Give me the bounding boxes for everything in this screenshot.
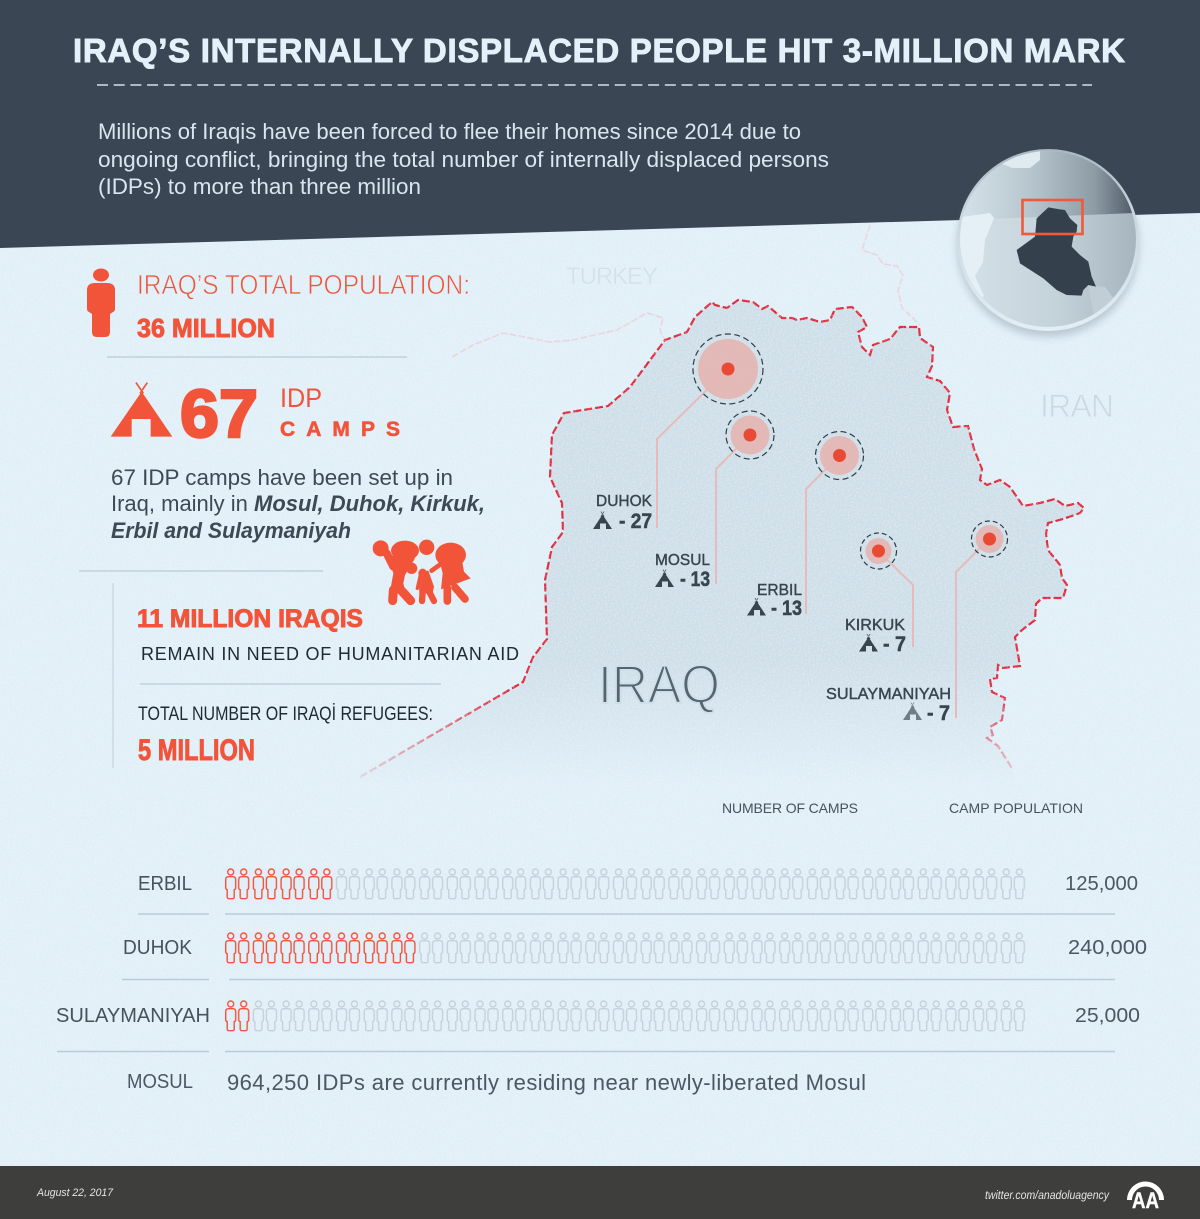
row: Erbil: ERBIL — [138, 873, 192, 895]
total population value: 36 MILLION — [137, 313, 275, 343]
icon: agency logo — [1127, 1182, 1164, 1213]
intro paragraph — [98, 119, 829, 199]
refugees label: TOTAL NUMBER OF IRAQİ REFUGEES: — [138, 704, 433, 725]
leader lines — [657, 369, 989, 718]
row: Mosul: 964,250 IDPs are currently residing near newly-liberated Mosul — [227, 1070, 866, 1095]
country labels — [566, 263, 1114, 715]
row: Sulaymaniyah — [56, 1000, 1140, 1036]
city label: Kirkuk — [845, 617, 906, 656]
camp marker: Erbil — [816, 432, 864, 480]
city label: Duhok: DUHOK — [596, 493, 652, 510]
footer twitter handle: twitter.com/anadoluagency — [985, 1190, 1110, 1202]
row: Erbil — [138, 868, 1138, 904]
camp marker: Duhok — [693, 334, 763, 404]
country labels: IRAQ — [598, 655, 720, 715]
map: Iraq shape — [360, 300, 1084, 790]
header band — [0, 0, 1200, 248]
row: Duhok: 240,000 — [1068, 937, 1147, 959]
city label: Mosul: - 13 — [680, 568, 710, 591]
city label: Erbil — [747, 582, 802, 620]
camps description: 67 IDP camps have been set up in — [111, 465, 453, 490]
paper texture — [0, 215, 1200, 1165]
intro paragraph: (IDPs) to more than three million — [98, 174, 421, 199]
column headers: CAMP POPULATION — [949, 800, 1083, 816]
city label: Sulaymaniyah — [826, 686, 951, 725]
camp marker: Sulaymaniyah — [972, 521, 1008, 557]
icon: refugees family — [373, 540, 471, 601]
city label: Kirkuk: - 7 — [883, 633, 906, 656]
row: Mosul: MOSUL — [127, 1071, 193, 1093]
row: Duhok: DUHOK — [123, 937, 193, 959]
city label: Erbil: ERBIL — [757, 582, 802, 599]
camps description — [111, 465, 485, 543]
city label: Mosul — [655, 552, 710, 591]
IDP camps label — [280, 383, 400, 441]
humanitarian aid text: REMAIN IN NEED OF HUMANITARIAN AID — [141, 644, 519, 664]
camp marker: Kirkuk — [860, 533, 896, 569]
map: neighbouring borders — [452, 225, 920, 357]
camps description: Iraq, mainly in Mosul, Duhok, Kirkuk, — [111, 491, 485, 516]
city label: Duhok — [593, 493, 652, 533]
city label: Kirkuk: KIRKUK — [845, 617, 905, 634]
row: Sulaymaniyah: SULAYMANIYAH — [56, 1005, 210, 1027]
row: Duhok — [123, 932, 1147, 968]
footer date: August 22, 2017 — [36, 1187, 114, 1199]
country labels: TURKEY — [566, 263, 658, 290]
intro paragraph: ongoing conflict, bringing the total number of internally displaced persons — [98, 147, 829, 172]
67 figure: 67 — [180, 376, 258, 452]
city label: Erbil: - 13 — [771, 597, 802, 620]
globe locator — [955, 148, 1140, 337]
row: Sulaymaniyah: 25,000 — [1075, 1005, 1140, 1027]
city label: Duhok: - 27 — [619, 510, 652, 533]
intro paragraph: Millions of Iraqis have been forced to flee their homes since 2014 due to — [98, 119, 801, 144]
column headers — [722, 800, 1083, 816]
IDP camps label: CAMPS — [280, 418, 400, 441]
city label: Mosul: MOSUL — [655, 552, 710, 569]
IDP camps label: IDP — [280, 383, 322, 413]
row: Erbil: 125,000 — [1065, 873, 1138, 895]
footer bar — [0, 1166, 1200, 1219]
refugees value: 5 MILLION — [138, 734, 255, 767]
country labels: IRAN — [1040, 388, 1114, 424]
11 million heading: 11 MILLION IRAQIS — [137, 605, 363, 633]
total population heading: IRAQ’S TOTAL POPULATION: — [137, 269, 470, 300]
camps description: Erbil and Sulaymaniyah — [111, 518, 351, 543]
city label: Sulaymaniyah: SULAYMANIYAH — [826, 686, 951, 703]
column headers: NUMBER OF CAMPS — [722, 800, 858, 816]
title: IRAQ’S INTERNALLY DISPLACED PEOPLE HIT 3-MILLION MARK — [73, 32, 1125, 69]
camp marker: Mosul — [726, 411, 774, 459]
icon: large tent — [111, 383, 172, 437]
icon: agency logo: AA — [1132, 1188, 1159, 1213]
city label: Sulaymaniyah: - 7 — [927, 702, 950, 725]
icon: person — [87, 268, 115, 337]
